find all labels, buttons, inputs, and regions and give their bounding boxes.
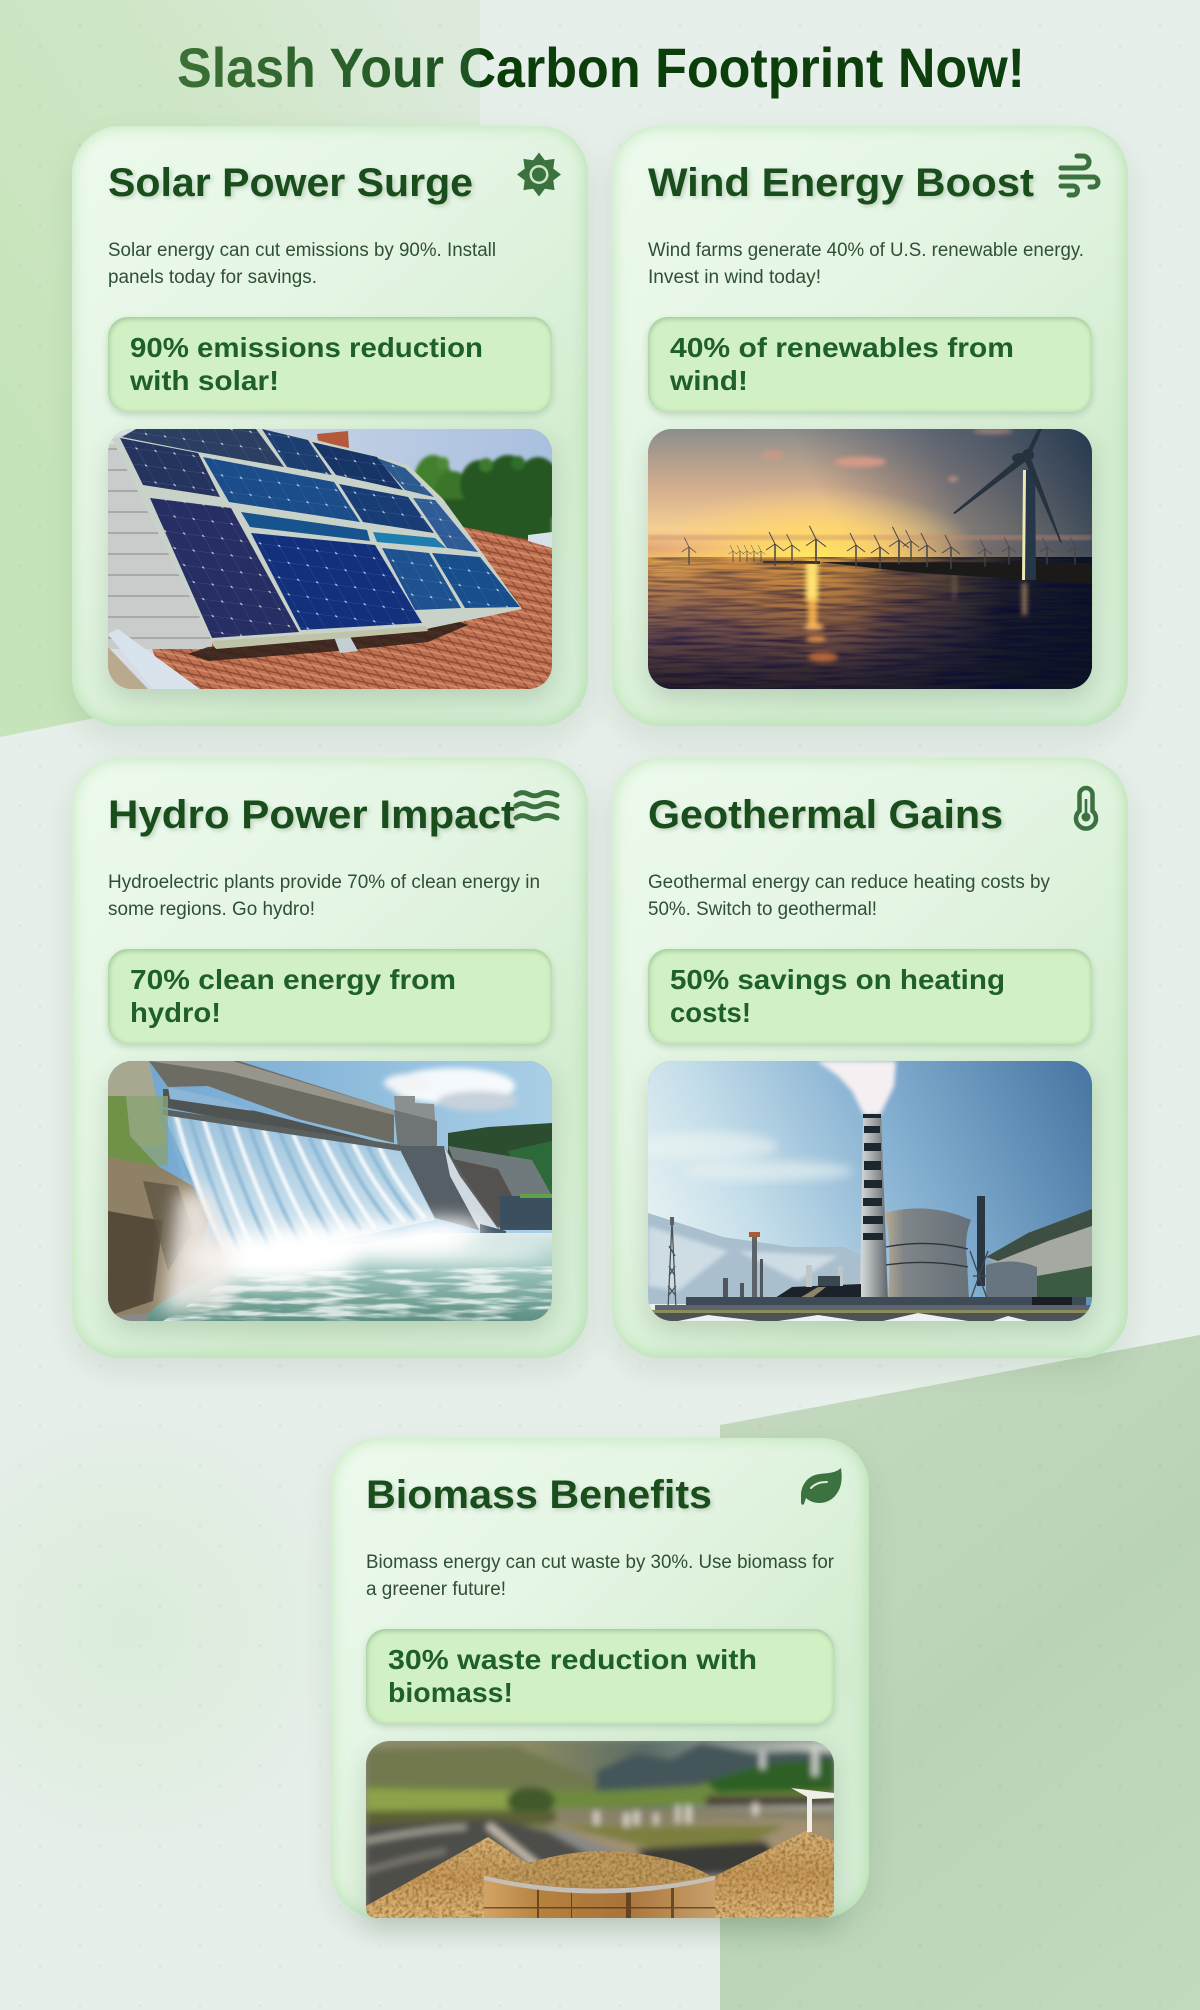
text: hydro description: some regions. Go hydro!	[108, 899, 315, 920]
stat callout: solar	[108, 317, 552, 412]
icon: wind	[1061, 156, 1098, 195]
stat callout: solar: 90% emissions reduction	[130, 332, 483, 363]
icon: water waves	[516, 792, 557, 819]
background shape: top-left green polygon	[0, 0, 480, 737]
icon: sun	[517, 152, 561, 196]
text: geothermal description	[648, 872, 1050, 920]
panel: solar power	[72, 126, 588, 726]
text: biomass description	[366, 1552, 835, 1600]
stat callout: wind: wind!	[669, 365, 748, 396]
text: hydro description: Hydroelectric plants provide 70% of clean energy in	[108, 872, 540, 893]
text: wind description: Invest in wind today!	[648, 267, 821, 288]
text: solar description	[108, 240, 496, 288]
heading: biomass: Biomass Benefits	[366, 1473, 712, 1517]
text: wind description	[648, 240, 1084, 288]
text: solar description: Solar energy can cut emissions by 90%. Install	[108, 240, 496, 261]
stat callout: wind	[648, 317, 1092, 412]
stat callout: biomass	[366, 1629, 834, 1724]
stat callout: geothermal: 50% savings on heating	[670, 964, 1005, 995]
photo: offshore wind farm at sunset	[648, 429, 1092, 689]
stat callout: geothermal	[648, 949, 1092, 1044]
stat callout: hydro	[108, 949, 552, 1044]
icon: thermometer	[1076, 788, 1096, 829]
text: solar description: panels today for savings.	[108, 267, 317, 288]
text: biomass description: Biomass energy can cut waste by 30%. Use biomass for	[366, 1552, 835, 1573]
photo: biomass grain and fields	[366, 1741, 834, 1918]
photo: hydroelectric dam	[108, 1061, 552, 1321]
panel: biomass	[331, 1438, 869, 1918]
text: geothermal description: 50%. Switch to geothermal!	[648, 899, 877, 920]
background shape: bottom-right green polygon	[720, 1335, 1200, 2010]
stat callout: solar: with solar!	[129, 365, 279, 396]
heading: wind: Wind Energy Boost	[648, 161, 1034, 205]
panel: hydro power	[72, 758, 588, 1358]
stat callout: geothermal: costs!	[670, 997, 751, 1028]
heading: solar: Solar Power Surge	[108, 161, 473, 205]
background glow: soft green circle bottom-left	[0, 1400, 360, 1860]
panel: wind energy	[612, 126, 1128, 726]
text: biomass description: a greener future!	[366, 1579, 506, 1600]
text: hydro description	[108, 872, 540, 920]
title: Slash Your Carbon Footprint Now!	[177, 36, 1025, 99]
photo: rooftop solar panels	[108, 429, 552, 689]
stat callout: hydro: 70% clean energy from	[130, 964, 456, 995]
heading: geothermal: Geothermal Gains	[648, 793, 1003, 837]
photo: geothermal power plant	[648, 1061, 1092, 1321]
stat callout: biomass: 30% waste reduction with	[388, 1644, 757, 1675]
heading: hydro: Hydro Power Impact	[108, 793, 515, 837]
stat callout: hydro: hydro!	[130, 997, 221, 1028]
stat callout: wind: 40% of renewables from	[670, 332, 1014, 363]
text: geothermal description: Geothermal energy can reduce heating costs by	[648, 872, 1050, 893]
panel: geothermal	[612, 758, 1128, 1358]
icon: leaf	[801, 1468, 842, 1505]
stat callout: biomass: biomass!	[388, 1677, 513, 1708]
text: wind description: Wind farms generate 40% of U.S. renewable energy.	[648, 240, 1084, 261]
